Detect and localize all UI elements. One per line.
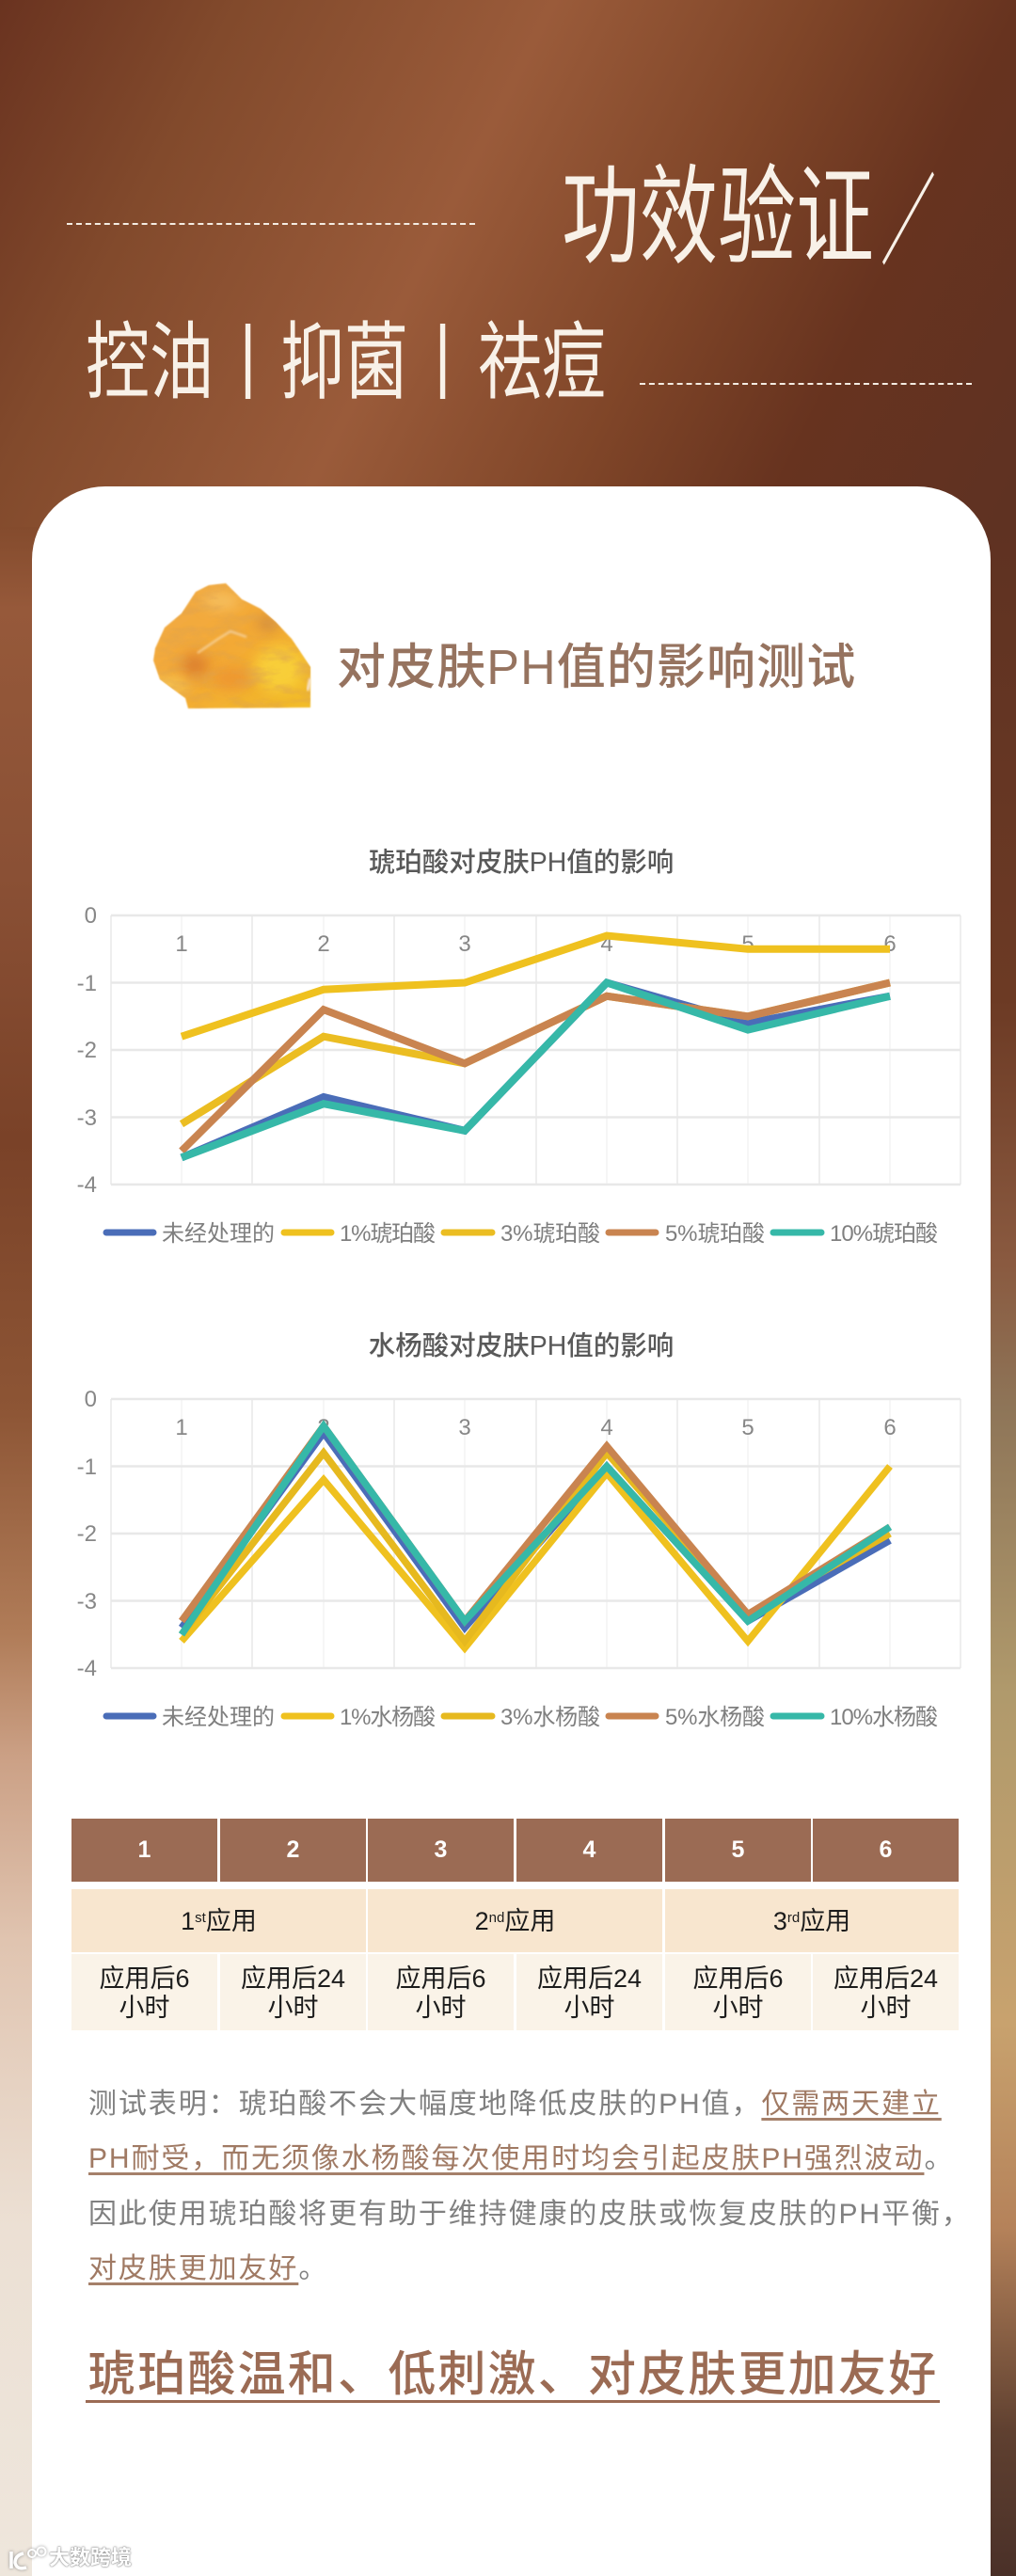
legend: 1%琥珀酸 — [340, 1221, 436, 1247]
subtitle: 控油 抑菌 祛痘: | — [240, 309, 256, 399]
table: application schedule: 应用后6 — [99, 1964, 190, 1993]
legend: 未经处理的 — [162, 1705, 275, 1730]
legend: 3%琥珀酸 — [500, 1221, 600, 1247]
subtitle: 控油 抑菌 祛痘: 控油 — [86, 316, 214, 410]
x axis labels: 5 — [741, 931, 754, 957]
y axis labels: 0 — [85, 1387, 97, 1412]
icon: amber gem — [152, 582, 312, 709]
table: application schedule: 应用后24 — [833, 1964, 938, 1993]
table: application schedule: 应用后24 — [537, 1964, 642, 1993]
dashed line top — [67, 223, 475, 225]
subtitle: 控油 抑菌 祛痘: | — [435, 309, 451, 399]
chart title: 水杨酸对皮肤PH值的影响 — [369, 1331, 674, 1361]
text block: test conclusion: 测试表明：琥珀酸不会大幅度地降低皮肤的PH值，仅需两天建立 — [88, 2089, 942, 2120]
x axis labels — [175, 1415, 897, 1440]
watermark — [8, 2544, 132, 2572]
title: 功效验证: 功效验证 — [562, 157, 874, 278]
table: application schedule: 1st应用 — [181, 1906, 257, 1934]
legend: 5%琥珀酸 — [665, 1221, 765, 1247]
x axis labels: 2 — [317, 1415, 330, 1440]
data lines — [182, 1426, 890, 1648]
dashed line lower — [640, 383, 972, 385]
panel: white card — [32, 486, 991, 2576]
y axis labels: -2 — [77, 1038, 97, 1063]
x axis labels: 2 — [317, 931, 330, 957]
y axis labels: -4 — [77, 1172, 97, 1198]
subtitle: 控油 抑菌 祛痘: 抑菌 — [280, 316, 408, 410]
table: application schedule: 小时 — [267, 1994, 318, 2022]
x axis labels: 6 — [883, 1415, 897, 1440]
headline conclusion: 琥珀酸温和、低刺激、对皮肤更加友好 — [87, 2347, 938, 2401]
table: application schedule: 2nd应用 — [475, 1906, 555, 1934]
x axis labels: 4 — [600, 931, 613, 957]
watermark: 大数跨境 — [49, 2546, 132, 2569]
table: application schedule: 3 — [435, 1837, 447, 1863]
table: application schedule — [71, 1819, 959, 2030]
text block: test conclusion: 因此使用琥珀酸将更有助于维持健康的皮肤或恢复皮肤的PH平衡， — [88, 2199, 972, 2230]
table: application schedule: 小时 — [564, 1994, 614, 2022]
chart: 水杨酸 — [77, 1331, 961, 1730]
table: application schedule: 小时 — [860, 1994, 911, 2022]
title slash: ／ — [881, 167, 936, 278]
table: application schedule: 6 — [880, 1837, 892, 1863]
x axis labels — [175, 931, 897, 957]
y axis labels: -4 — [77, 1656, 97, 1681]
x axis labels: 1 — [175, 1415, 188, 1440]
table: application schedule: 5 — [732, 1837, 744, 1863]
legend: 5%水杨酸 — [665, 1705, 765, 1730]
y axis labels: -3 — [77, 1105, 97, 1131]
table: application schedule: 应用后6 — [692, 1964, 784, 1993]
subtitle: 控油 抑菌 祛痘 — [86, 309, 606, 410]
legend: 1%水杨酸 — [340, 1705, 436, 1730]
chart: 琥珀酸 — [77, 848, 961, 1247]
x axis labels: 5 — [741, 1415, 754, 1440]
legend: 3%水杨酸 — [500, 1705, 600, 1730]
table: application schedule: 小时 — [713, 1994, 764, 2022]
table: application schedule: 4 — [583, 1837, 595, 1863]
y axis labels: 0 — [85, 903, 97, 929]
legend: 10%水杨酸 — [830, 1705, 938, 1730]
x axis labels: 3 — [458, 931, 471, 957]
table: application schedule: 应用后24 — [241, 1964, 345, 1993]
table: application schedule: 小时 — [416, 1994, 467, 2022]
x axis labels: 4 — [600, 1415, 613, 1440]
y axis labels — [77, 1387, 97, 1681]
y axis labels: -1 — [77, 971, 97, 996]
legend: 10%琥珀酸 — [830, 1221, 938, 1247]
text block: test conclusion: PH耐受，而无须像水杨酸每次使用时均会引起皮肤PH强烈波动。 — [88, 2143, 954, 2174]
y axis labels: -1 — [77, 1455, 97, 1480]
y axis labels — [77, 903, 97, 1198]
legend: 未经处理的 — [162, 1221, 275, 1247]
y axis labels: -3 — [77, 1589, 97, 1614]
table: application schedule: 应用后6 — [395, 1964, 486, 1993]
data lines — [182, 935, 890, 1157]
text block: test conclusion — [88, 2089, 972, 2285]
x axis labels: 3 — [458, 1415, 471, 1440]
x axis labels: 6 — [883, 931, 897, 957]
table: application schedule: 3rd应用 — [773, 1906, 850, 1934]
chart title: 琥珀酸对皮肤PH值的影响 — [369, 848, 674, 878]
table: application schedule: 小时 — [119, 1994, 169, 2022]
table: application schedule: 1 — [138, 1837, 151, 1863]
text block: test conclusion: 对皮肤更加友好。 — [88, 2253, 328, 2284]
legend — [106, 1221, 938, 1247]
headline underline — [86, 2400, 940, 2403]
subtitle: 控油 抑菌 祛痘: 祛痘 — [478, 316, 606, 410]
legend — [106, 1705, 938, 1730]
x axis labels: 1 — [175, 931, 188, 957]
heading: PH test: 对皮肤PH值的影响测试 — [337, 641, 856, 695]
y axis labels: -2 — [77, 1521, 97, 1547]
table: application schedule: 2 — [287, 1837, 299, 1863]
